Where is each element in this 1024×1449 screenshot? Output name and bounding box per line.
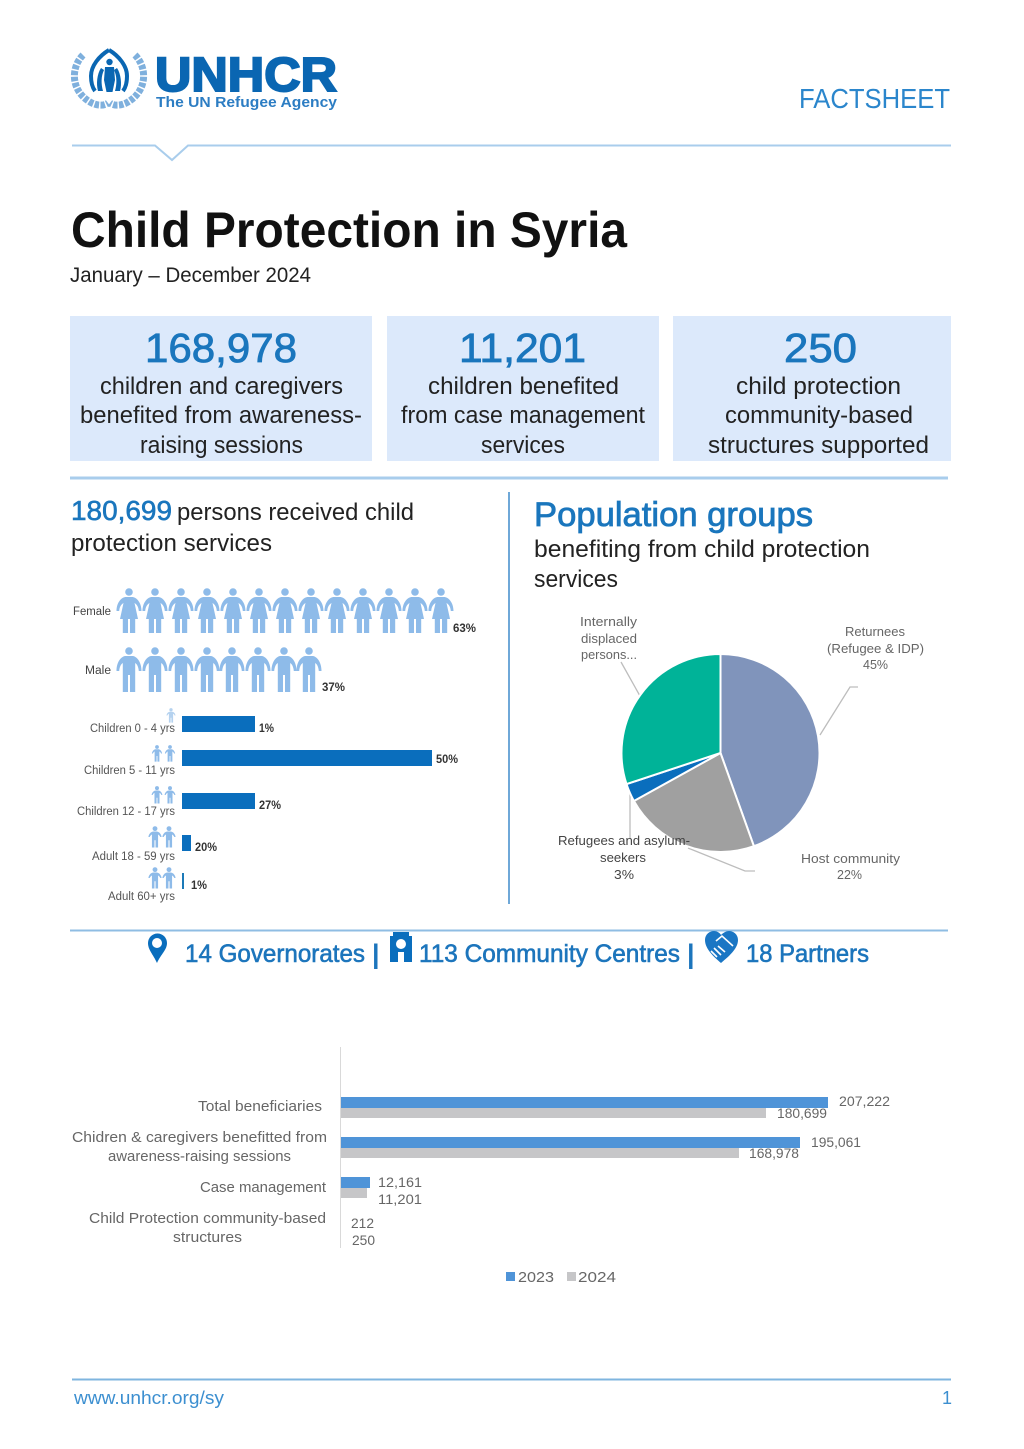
pie label: refugees and asylum-seekers: [558, 833, 690, 882]
age row: adult 60+: [108, 867, 207, 903]
heading: population groups: [534, 496, 870, 593]
age row: children 5-11: [84, 745, 458, 777]
key figure: community structures: community-based: [725, 402, 913, 429]
row: total beneficiaries: 207,222: [839, 1093, 890, 1109]
pie label: host community: [801, 851, 901, 882]
pictogram: male share: 37%: [322, 682, 345, 694]
row: community structures: [89, 1210, 375, 1248]
row: community structures: 250: [352, 1232, 375, 1248]
age row: children 0-4: Children 0 - 4 yrs: [90, 723, 175, 735]
heading: persons received services: persons received child: [177, 499, 414, 526]
age row: adult 18-59: [92, 826, 217, 863]
row: total beneficiaries: 180,699: [777, 1105, 827, 1121]
row: awareness sessions: [72, 1129, 861, 1165]
row: awareness sessions: 195,061: [811, 1134, 861, 1150]
pie leader lines: [621, 662, 858, 871]
logo emblem: [74, 50, 144, 105]
stat: partners: 18 Partners: [746, 940, 869, 968]
age row: adult 60+: Adult 60+ yrs: [108, 891, 175, 903]
row: case management: 11,201: [378, 1191, 422, 1207]
key figure: case management: services: [481, 432, 565, 459]
pictogram: female share: 63%: [453, 623, 476, 635]
date range: January – December 2024: [70, 264, 311, 287]
stat: community centres: 113 Community Centres: [419, 940, 680, 968]
stat: governorates: 14 Governorates: [185, 940, 365, 968]
row: case management: Case management: [200, 1179, 327, 1196]
heading: population groups: Population groups: [534, 496, 813, 534]
pie label: host community: 22%: [837, 867, 862, 882]
pie label: internally displaced: Internally: [580, 614, 638, 629]
chart legend: 2023: [518, 1269, 554, 1286]
pie label: internally displaced: displaced: [581, 631, 637, 646]
key figure: case management: 11,201: [459, 325, 586, 371]
key figure: case management: children benefited: [428, 373, 619, 400]
row: awareness sessions: awareness-raising sessions: [108, 1148, 291, 1165]
key figure: awareness sessions: benefited from awareness-: [80, 402, 362, 429]
pie label: refugees and asylum-seekers: Refugees and asylum-: [558, 833, 690, 848]
factsheet label: FACTSHEET: [799, 83, 950, 114]
stats strip: [148, 931, 869, 969]
age row: children 12-17: Children 12 - 17 yrs: [77, 806, 175, 818]
icon: location pin: [148, 934, 167, 963]
pie label: internally displaced: [580, 614, 638, 662]
key figure: community structures: 250: [784, 325, 857, 371]
chart legend: 2024: [578, 1269, 616, 1286]
pie label: refugees and asylum-seekers: 3%: [614, 867, 634, 882]
key figure: case management: from case management: [401, 402, 645, 429]
heading: population groups: services: [534, 566, 618, 593]
key figure: community structures: child protection: [736, 373, 901, 400]
age row: children 0-4: [90, 708, 274, 735]
page number: 1: [942, 1388, 952, 1408]
chart legend: [506, 1269, 616, 1286]
heading: population groups: benefiting from child protection: [534, 536, 870, 563]
age row: children 12-17: [77, 786, 281, 818]
age row: adult 18-59: 20%: [195, 842, 217, 854]
key figure: awareness sessions: [70, 316, 372, 461]
pie slices: [621, 654, 820, 852]
row: community structures: structures: [173, 1229, 242, 1246]
key figure: community structures: structures supported: [708, 432, 929, 459]
row: awareness sessions: 168,978: [749, 1145, 799, 1161]
logo tagline: The UN Refugee Agency: [156, 94, 338, 111]
pie label: host community: Host community: [801, 851, 901, 866]
separator: |: [372, 939, 380, 969]
pictogram: female share: Female: [73, 606, 111, 618]
row: total beneficiaries: Total beneficiaries: [198, 1098, 322, 1115]
icon: handshake heart: [705, 931, 738, 963]
title: Child Protection in Syria: [71, 202, 628, 258]
pie chart: population groups: [558, 614, 924, 882]
pie label: returnees: [827, 624, 924, 672]
key figure: community structures: [673, 316, 951, 461]
row: awareness sessions: Chidren & caregivers benefitted from: [72, 1129, 327, 1146]
comparison bar chart 2023 vs 2024: [72, 1047, 890, 1286]
footer url: www.unhcr.org/sy: [73, 1388, 224, 1408]
pie label: internally displaced: persons...: [581, 647, 637, 662]
age row: adult 60+: 1%: [191, 880, 207, 892]
row: total beneficiaries: [198, 1093, 890, 1121]
pictogram: male share: Male: [85, 665, 111, 677]
age row: children 5-11: Children 5 - 11 yrs: [84, 765, 175, 777]
age row: children 12-17: 27%: [259, 800, 281, 812]
age bar chart: [77, 708, 458, 903]
row: community structures: Child Protection community-based: [89, 1210, 326, 1227]
key figure: awareness sessions: children and caregivers: [100, 373, 343, 400]
icon: community centre: [390, 932, 412, 962]
row: case management: 12,161: [378, 1174, 422, 1190]
row: case management: [200, 1174, 422, 1207]
key figure: awareness sessions: raising sessions: [140, 432, 303, 459]
pie label: returnees: (Refugee & IDP): [827, 641, 924, 656]
row: community structures: 212: [351, 1215, 374, 1231]
heading: persons received services: [71, 495, 414, 557]
UNHCR logo: [74, 49, 338, 111]
pictogram: female share: [73, 588, 476, 635]
separator: |: [687, 939, 695, 969]
pie label: returnees: 45%: [863, 657, 888, 672]
age row: children 0-4: 1%: [259, 723, 274, 735]
logo wordmark: UNHCR: [155, 49, 337, 102]
pie label: refugees and asylum-seekers: seekers: [600, 850, 646, 865]
heading: persons received services: 180,699: [71, 495, 172, 526]
age row: adult 18-59: Adult 18 - 59 yrs: [92, 851, 175, 863]
key figure: case management: [387, 316, 659, 461]
pictogram: male share: [85, 647, 345, 694]
key figure: awareness sessions: 168,978: [145, 325, 297, 371]
age row: children 5-11: 50%: [436, 754, 458, 766]
heading: persons received services: protection services: [71, 530, 272, 557]
pie label: returnees: Returnees: [845, 624, 905, 639]
